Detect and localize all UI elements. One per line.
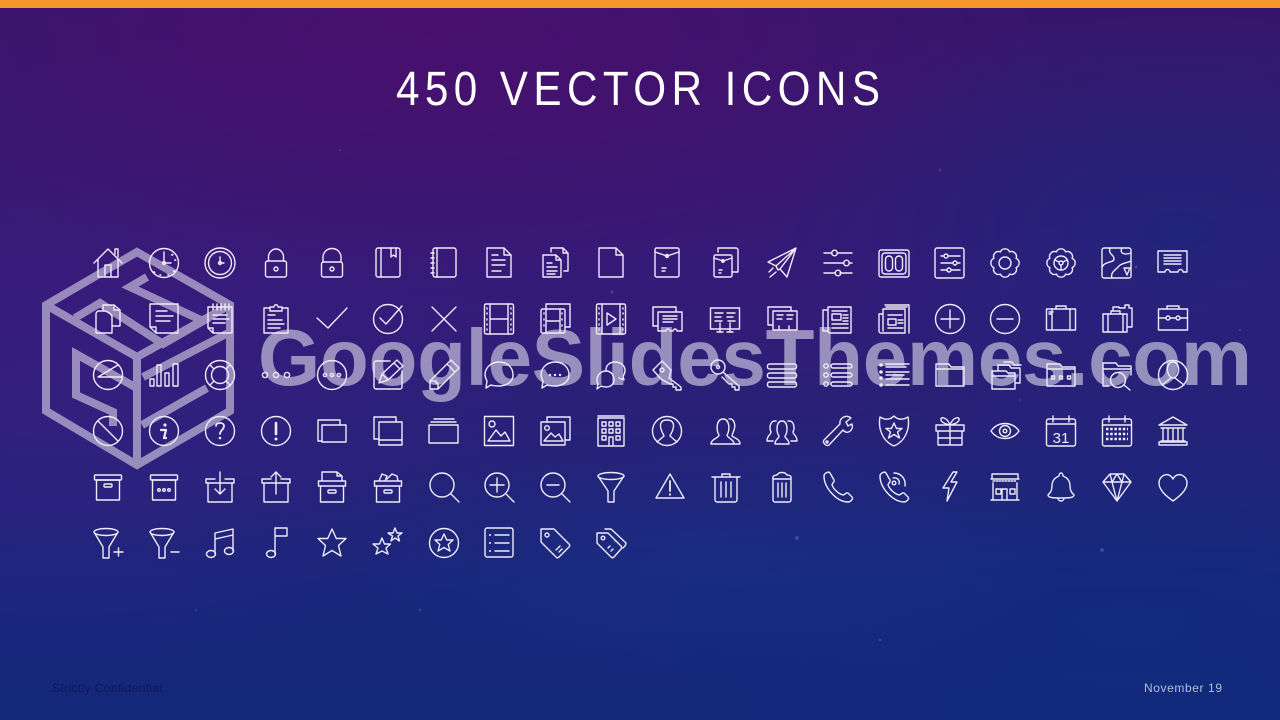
icon: box download — [206, 472, 234, 502]
icon: bell — [1048, 473, 1074, 501]
icon grid — [94, 248, 1188, 558]
icon: info circle — [150, 416, 178, 446]
row 5 icons — [94, 472, 1187, 502]
icon: folder — [936, 364, 964, 386]
icon: round key — [711, 360, 739, 390]
icon: notepad — [208, 304, 232, 333]
icon: price tags — [597, 529, 626, 558]
icon: shield star — [880, 416, 908, 446]
icon: price tag — [541, 529, 570, 558]
icon: box upload — [262, 472, 290, 502]
icon: pie chart circle — [94, 360, 122, 390]
icon: sticky note — [150, 304, 178, 333]
icon: spiral notebook — [431, 248, 456, 277]
icon: key — [653, 361, 681, 390]
icon: zoom in — [485, 473, 514, 502]
icon: windows — [318, 420, 346, 442]
icon: funnel — [598, 472, 624, 502]
icon: diamond — [1103, 474, 1131, 501]
icon: film strip — [484, 304, 514, 334]
icon: stacked folders — [429, 419, 458, 443]
icon: clock dotted — [150, 248, 178, 278]
icon: warning — [656, 474, 684, 498]
icon: check circle — [374, 304, 402, 334]
icon: music notes — [206, 529, 234, 558]
icon: eye — [991, 424, 1019, 438]
icon: open lock — [322, 248, 342, 277]
icon: search — [430, 473, 459, 502]
icon: image — [484, 416, 514, 446]
icon: envelope — [655, 248, 679, 277]
icon: folders — [992, 362, 1021, 389]
icon: document — [487, 248, 511, 277]
icon: board stack — [768, 307, 797, 330]
icon: sign board — [710, 308, 740, 332]
icon: box with file — [318, 472, 346, 502]
icon: slider box — [935, 248, 964, 278]
icon: zoom out — [541, 473, 570, 502]
icon: full trash — [773, 472, 791, 502]
icon: two people — [711, 419, 740, 444]
icon: speech bubble — [485, 362, 513, 388]
icon: edit square — [374, 360, 403, 389]
icon: user circle — [1158, 360, 1188, 390]
icon: bank — [1159, 417, 1187, 445]
icon: folder dots — [1047, 364, 1075, 386]
icon: three dots — [262, 372, 290, 378]
icon: stacked list — [768, 364, 796, 387]
icon: check mark — [317, 308, 347, 328]
icon: clock ring — [205, 248, 235, 278]
icon: wrench — [824, 416, 852, 446]
icon: ticket — [1158, 251, 1187, 272]
icon: funnel plus — [94, 528, 123, 558]
icon: images — [541, 417, 570, 445]
icon: office building — [598, 416, 624, 446]
icon: funnel minus — [150, 528, 179, 558]
icon: toolbox — [1158, 306, 1188, 330]
icon: briefcases — [1103, 305, 1132, 332]
icon: star — [318, 529, 346, 556]
icon: lifebuoy — [206, 360, 234, 390]
footer: confidentiality note: Strictly Confidential. — [52, 681, 166, 695]
icon: house — [94, 249, 122, 277]
icon: speech dots — [541, 362, 569, 388]
watermark text: GoogleSlidesThemes.com — [258, 313, 1252, 402]
icon: calendar 31: 31 — [1053, 430, 1069, 447]
icon: windows with bar — [374, 417, 402, 445]
icon: store — [991, 474, 1019, 500]
row 3 icons — [94, 360, 1188, 390]
icon: blank page — [599, 248, 623, 277]
title: 450 VECTOR ICONS — [396, 61, 880, 116]
icon: checklist — [485, 528, 513, 557]
icon: plus circle — [936, 304, 964, 334]
icon: documents — [543, 248, 568, 277]
icon: star circle — [430, 528, 458, 558]
icon: two speech bubbles — [597, 362, 625, 389]
icon: two stars — [373, 528, 402, 554]
icon: box dots — [150, 475, 178, 500]
icon: paper plane — [768, 248, 796, 277]
icon: gift — [936, 418, 964, 445]
row 6 icons — [94, 528, 626, 558]
icon: heart — [1159, 475, 1187, 501]
icon: ticket stack — [653, 307, 682, 331]
icon: pencil — [430, 360, 459, 389]
icon: film play — [596, 304, 626, 334]
icon: phone with signal — [880, 472, 909, 502]
watermark logo cube — [46, 252, 230, 465]
row 4 icons — [94, 416, 1187, 447]
icon: lightning bolt — [943, 472, 957, 501]
icon: film strips — [541, 304, 570, 333]
row 2 icons — [96, 304, 1188, 334]
icon: dots circle — [318, 360, 346, 390]
icon: exclamation circle — [262, 416, 290, 446]
row 1 icons — [94, 248, 1187, 278]
icon: lock — [266, 249, 286, 277]
icon: newspaper stack — [823, 307, 851, 333]
icon: phone — [824, 472, 853, 502]
icon: box with items — [374, 474, 402, 502]
icon: envelopes — [714, 248, 738, 277]
orange top bar — [0, 0, 1280, 8]
icon: cross — [432, 307, 456, 331]
icon: bullet list boxed — [824, 364, 852, 386]
icon: map — [1102, 248, 1131, 278]
icon: book — [376, 248, 400, 277]
icon: three people — [767, 421, 797, 444]
icon: newspaper folded — [879, 305, 909, 333]
icon: bar chart — [150, 364, 178, 386]
footer: date: November 19 — [1144, 681, 1222, 695]
icon: briefcase — [1046, 306, 1076, 330]
icon: clipboard — [264, 305, 288, 333]
icon: prohibited — [94, 416, 122, 446]
icon: single note — [266, 528, 287, 558]
icon: minus circle — [990, 304, 1020, 334]
icon: calendar grid — [1102, 416, 1132, 446]
icon: person circle — [652, 416, 682, 446]
icon: archive box — [94, 475, 122, 500]
icon: gear — [991, 249, 1019, 277]
icon: files — [96, 305, 120, 333]
icon: sliders — [824, 250, 852, 276]
icon: folder search — [1103, 363, 1131, 390]
icon: switch panel — [879, 250, 909, 277]
icon: question circle — [206, 416, 234, 446]
icon: gear with wheel — [1047, 249, 1075, 277]
icon: calendar 31 — [1046, 416, 1076, 447]
icon: bullet lines — [879, 363, 909, 387]
icon: trash can — [712, 474, 740, 502]
